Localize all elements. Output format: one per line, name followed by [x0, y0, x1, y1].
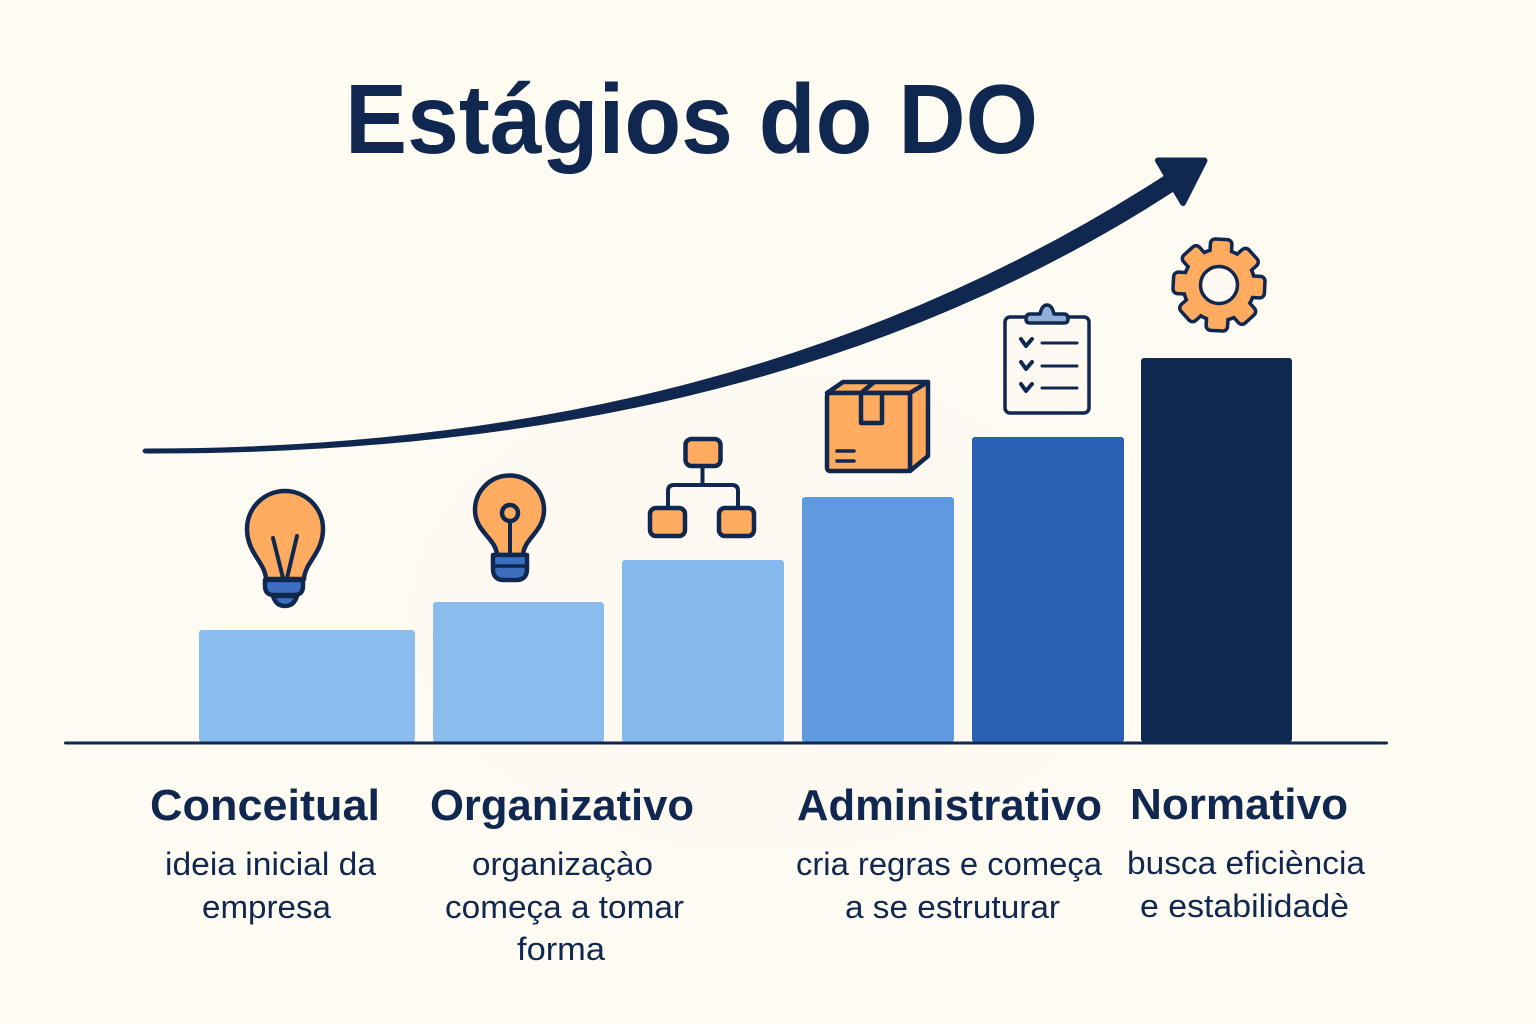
heading: Administrativo: Administrativo — [797, 781, 1102, 830]
label block: Administrativo — [796, 781, 1102, 925]
title: Estágios do DO — [345, 64, 1038, 174]
description: Administrativo: a se estruturar — [845, 889, 1060, 925]
description: Organizativo: forma — [517, 931, 605, 967]
bar: Administrativo — [802, 497, 954, 742]
icon: checklist clipboard — [1005, 305, 1089, 413]
description: Normativo: e estabilidadè — [1140, 888, 1349, 924]
heading: Conceitual: Conceitual — [150, 781, 380, 830]
description: Organizativo — [445, 846, 684, 967]
description: Normativo — [1127, 845, 1365, 924]
description: Conceitual: empresa — [202, 889, 331, 925]
description: Organizativo: organizaçào — [472, 846, 653, 882]
arrow: rising growth curve — [143, 160, 1204, 453]
icon: organization chart — [650, 439, 754, 536]
baseline — [64, 742, 1388, 744]
bar: Normativo — [1141, 358, 1292, 742]
bar: stage three — [622, 560, 784, 742]
heading: Normativo: Normativo — [1130, 780, 1348, 829]
icon: gear — [1173, 239, 1265, 331]
description: Administrativo: cria regras e começa — [796, 846, 1102, 882]
icon: small light bulb — [475, 476, 544, 580]
description: Organizativo: começa a tomar — [445, 889, 684, 925]
label block: Organizativo — [430, 781, 694, 967]
label block: Conceitual — [150, 781, 380, 925]
description: Conceitual — [165, 846, 376, 925]
description: Conceitual: ideia inicial da — [165, 846, 376, 882]
bar chart: six rising stages — [64, 358, 1388, 744]
icon: cardboard box — [827, 382, 928, 471]
description: Normativo: busca eficiència — [1127, 845, 1365, 881]
bar: Organizativo — [433, 602, 604, 742]
bar: stage five — [972, 437, 1124, 742]
label block: Normativo — [1127, 780, 1365, 924]
icon: light bulb with filaments — [247, 491, 323, 606]
bar: Conceitual — [199, 630, 415, 742]
description: Administrativo — [796, 846, 1102, 925]
heading: Organizativo: Organizativo — [430, 781, 694, 830]
